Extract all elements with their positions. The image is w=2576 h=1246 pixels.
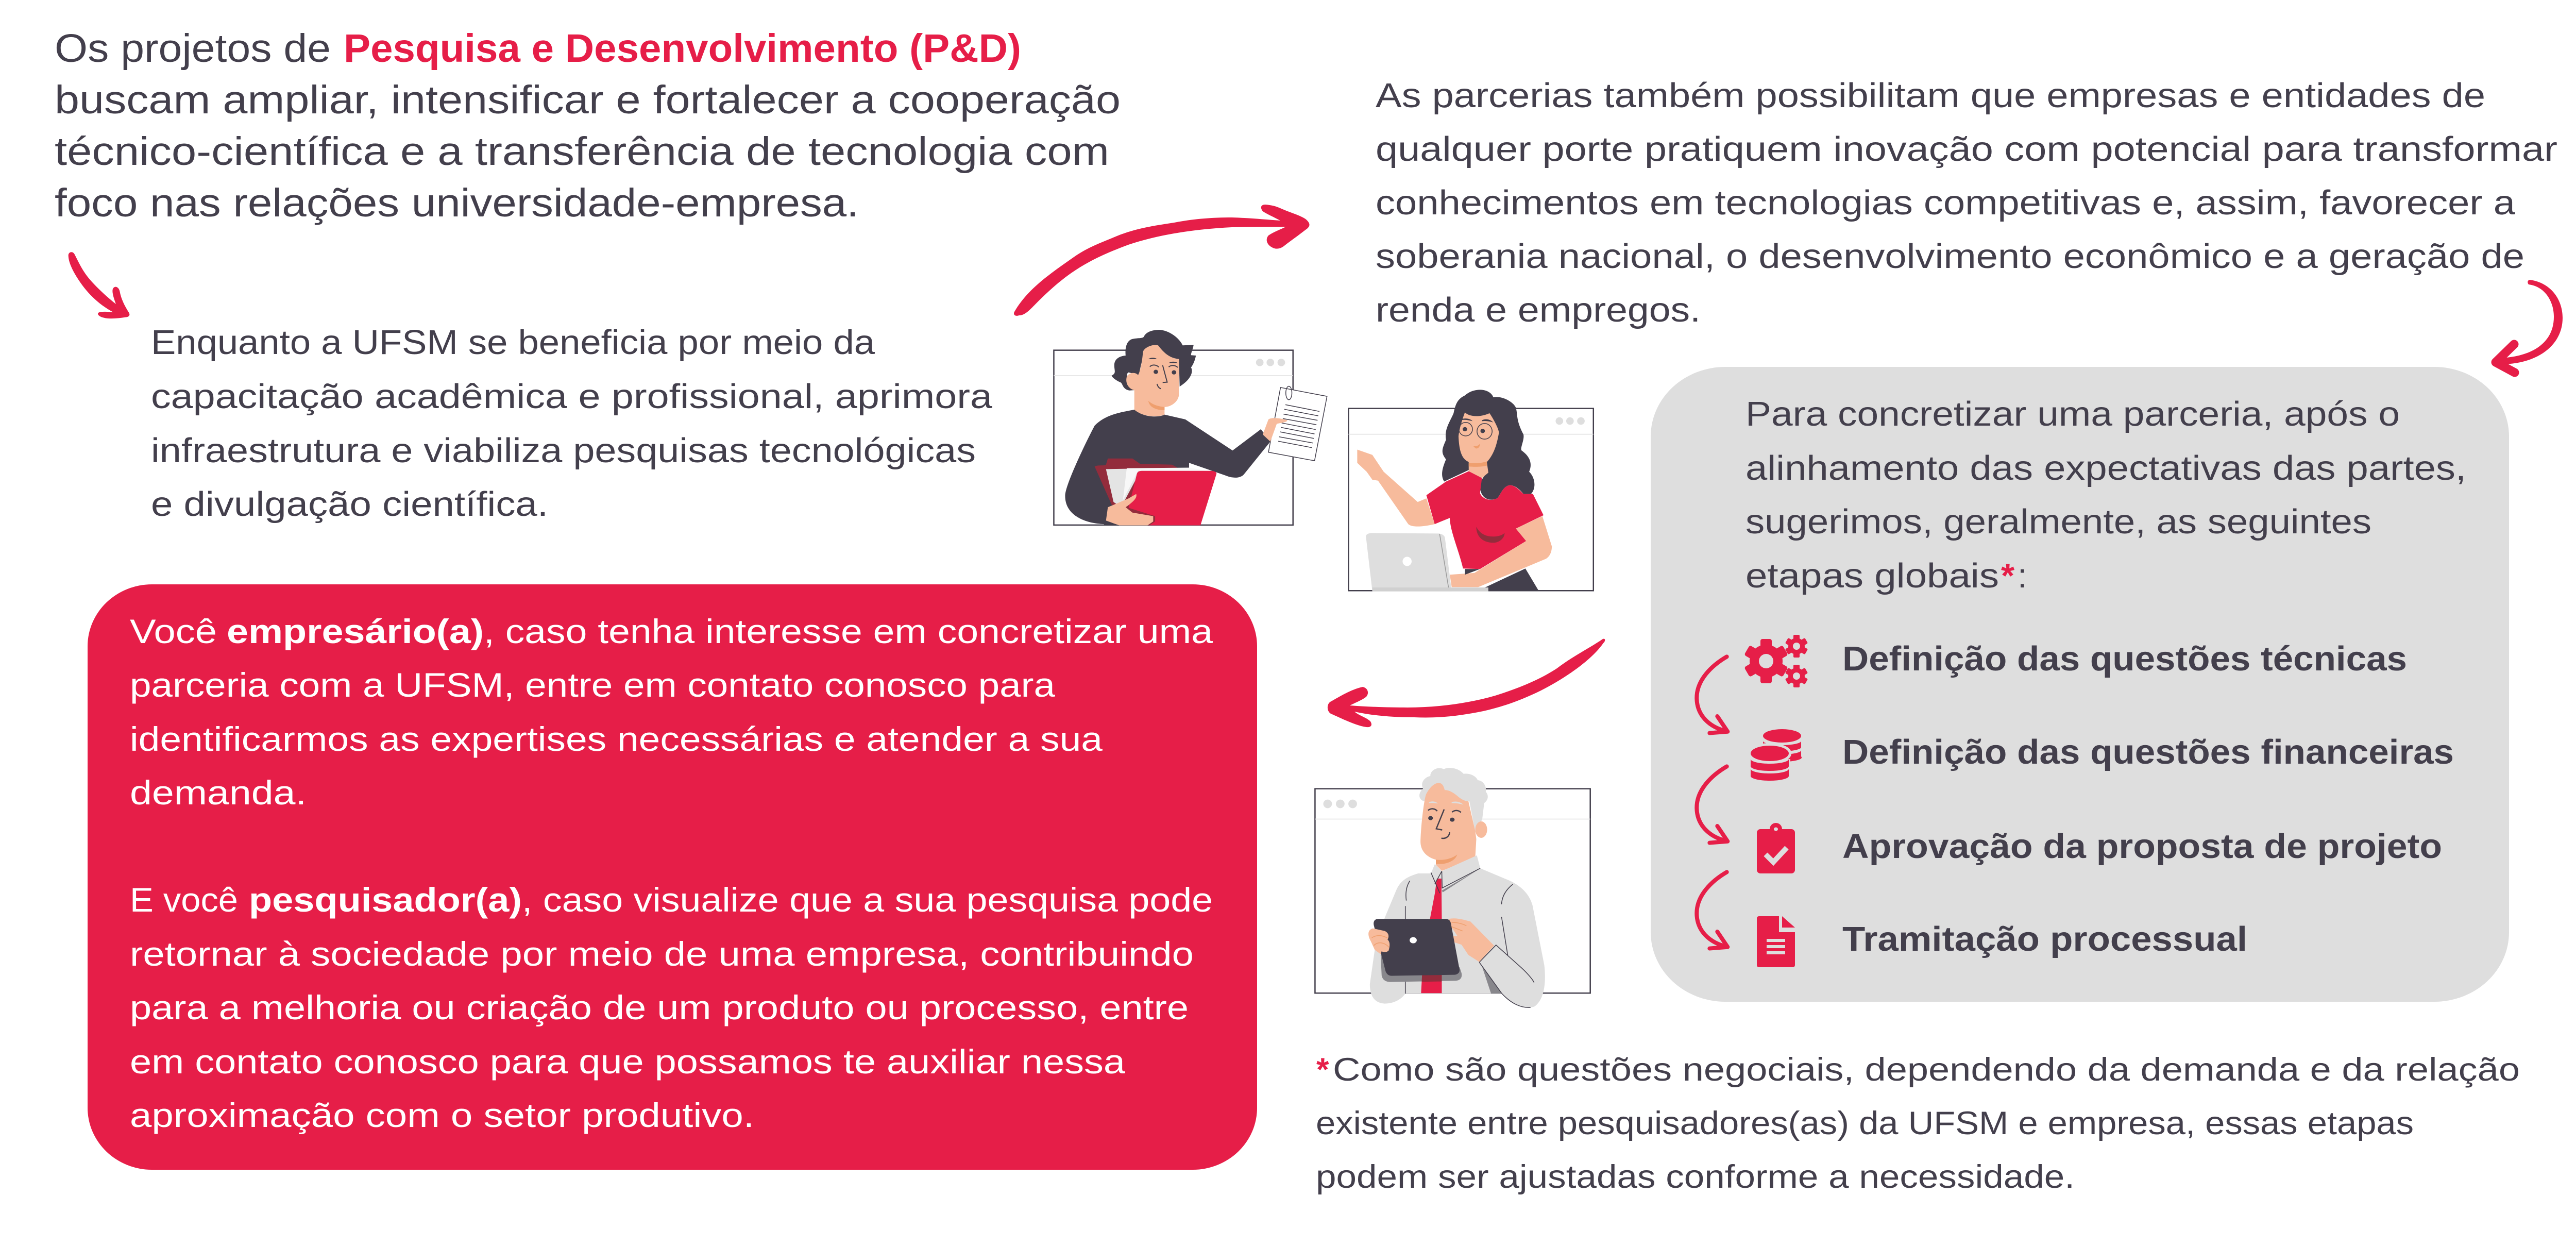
step labels: Tramitação processual bbox=[1842, 920, 2247, 958]
text: steps introduction: Para concretizar uma parceria, após o bbox=[1745, 395, 2400, 433]
text: steps introduction: alinhamento das expectativas das partes, bbox=[1745, 449, 2466, 487]
text block: UFSM benefits: e divulgação científica. bbox=[151, 485, 548, 524]
step labels: Definição das questões financeiras bbox=[1842, 733, 2454, 771]
text: steps introduction: : bbox=[2018, 557, 2027, 595]
text: message to business owners: Você bbox=[130, 612, 217, 650]
text: message to researchers: , caso visualize que a sua pesquisa pode bbox=[522, 881, 1213, 919]
text block: partnerships: renda e empregos. bbox=[1376, 291, 1701, 329]
text: message to business owners bbox=[130, 612, 1213, 812]
text block: UFSM benefits bbox=[151, 323, 993, 524]
intro text block: Os projetos de bbox=[55, 26, 331, 71]
text block: partnerships: As parcerias também possibilitam que empresas e entidades de bbox=[1376, 76, 2485, 115]
text: steps introduction: sugerimos, geralmente, as seguintes bbox=[1745, 502, 2371, 541]
icon: clipboard with check bbox=[1757, 823, 1795, 873]
footnote: * bbox=[1316, 1052, 1329, 1088]
text: message to researchers: retornar à sociedade por meio de uma empresa, contribuindo bbox=[130, 935, 1194, 973]
arrow: intro to UFSM text bbox=[69, 252, 129, 318]
text: message to business owners: , caso tenha interesse em concretizar uma bbox=[484, 612, 1213, 650]
icon: document bbox=[1757, 916, 1795, 967]
illustration: man holding folder and document bbox=[1054, 330, 1327, 526]
arrow: steps panel to red panel bbox=[1328, 639, 1605, 727]
arrow: step 3 to step 4 bbox=[1697, 872, 1727, 949]
footnote bbox=[1316, 1052, 2520, 1195]
text block: UFSM benefits: infraestrutura e viabiliza pesquisas tecnológicas bbox=[151, 431, 976, 470]
text: steps introduction: etapas globais bbox=[1745, 557, 1999, 595]
text: steps introduction bbox=[1745, 395, 2466, 595]
illustration: older man with tablet bbox=[1315, 768, 1590, 1007]
intro text block: foco nas relações universidade-empresa. bbox=[55, 181, 859, 225]
text: message to researchers: aproximação com o setor produtivo. bbox=[130, 1096, 754, 1134]
text block: partnerships bbox=[1376, 76, 2557, 329]
text: steps introduction: * bbox=[2001, 557, 2015, 595]
text: message to researchers bbox=[130, 881, 1213, 1134]
icon: coins bbox=[1751, 729, 1802, 781]
intro text block: técnico-científica e a transferência de tecnologia com bbox=[55, 129, 1109, 174]
text: message to researchers: para a melhoria ou criação de um produto ou processo, entre bbox=[130, 988, 1189, 1026]
text block: partnerships: qualquer porte pratiquem inovação com potencial para transformar bbox=[1376, 130, 2557, 169]
intro text block bbox=[55, 26, 1121, 225]
arrow: step 2 to step 3 bbox=[1697, 766, 1727, 843]
arrow: top centre pointing right bbox=[1014, 205, 1310, 316]
step labels bbox=[1842, 639, 2454, 958]
text: message to researchers: E você bbox=[130, 881, 238, 919]
footnote: podem ser ajustadas conforme a necessidade. bbox=[1316, 1159, 2075, 1195]
text block: UFSM benefits: Enquanto a UFSM se beneficia por meio da bbox=[151, 323, 875, 362]
text block: partnerships: conhecimentos em tecnologias competitivas e, assim, favorecer a bbox=[1376, 183, 2516, 222]
text: message to researchers: pesquisador(a) bbox=[249, 881, 522, 919]
panel: red call to action bbox=[88, 584, 1257, 1170]
text: message to business owners: parceria com a UFSM, entre em contato conosco para bbox=[130, 666, 1055, 704]
text block: partnerships: soberania nacional, o desenvolvimento econômico e a geração de bbox=[1376, 237, 2524, 276]
arrow: partnerships to steps panel bbox=[2496, 280, 2563, 373]
arrow: step 1 to step 2 bbox=[1697, 656, 1727, 733]
icon: gears bbox=[1744, 635, 1808, 687]
text: message to business owners: empresário(a) bbox=[227, 612, 484, 650]
text: message to business owners: demanda. bbox=[130, 773, 307, 812]
text: message to researchers: em contato conosco para que possamos te auxiliar nessa bbox=[130, 1042, 1125, 1081]
text block: UFSM benefits: capacitação acadêmica e profissional, aprimora bbox=[151, 377, 993, 416]
intro text block: Pesquisa e Desenvolvimento (P&D) bbox=[344, 26, 1021, 71]
step labels: Definição das questões técnicas bbox=[1842, 639, 2407, 678]
step labels: Aprovação da proposta de projeto bbox=[1842, 827, 2442, 866]
text: message to business owners: identificarmos as expertises necessárias e atender a sua bbox=[130, 720, 1103, 758]
intro text block: buscam ampliar, intensificar e fortalecer a cooperação bbox=[55, 78, 1121, 122]
illustration: woman with laptop bbox=[1349, 390, 1594, 592]
footnote: Como são questões negociais, dependendo da demanda e da relação bbox=[1333, 1052, 2520, 1088]
footnote: existente entre pesquisadores(as) da UFSM e empresa, essas etapas bbox=[1316, 1105, 2414, 1141]
panel: global steps bbox=[1651, 367, 2509, 1002]
